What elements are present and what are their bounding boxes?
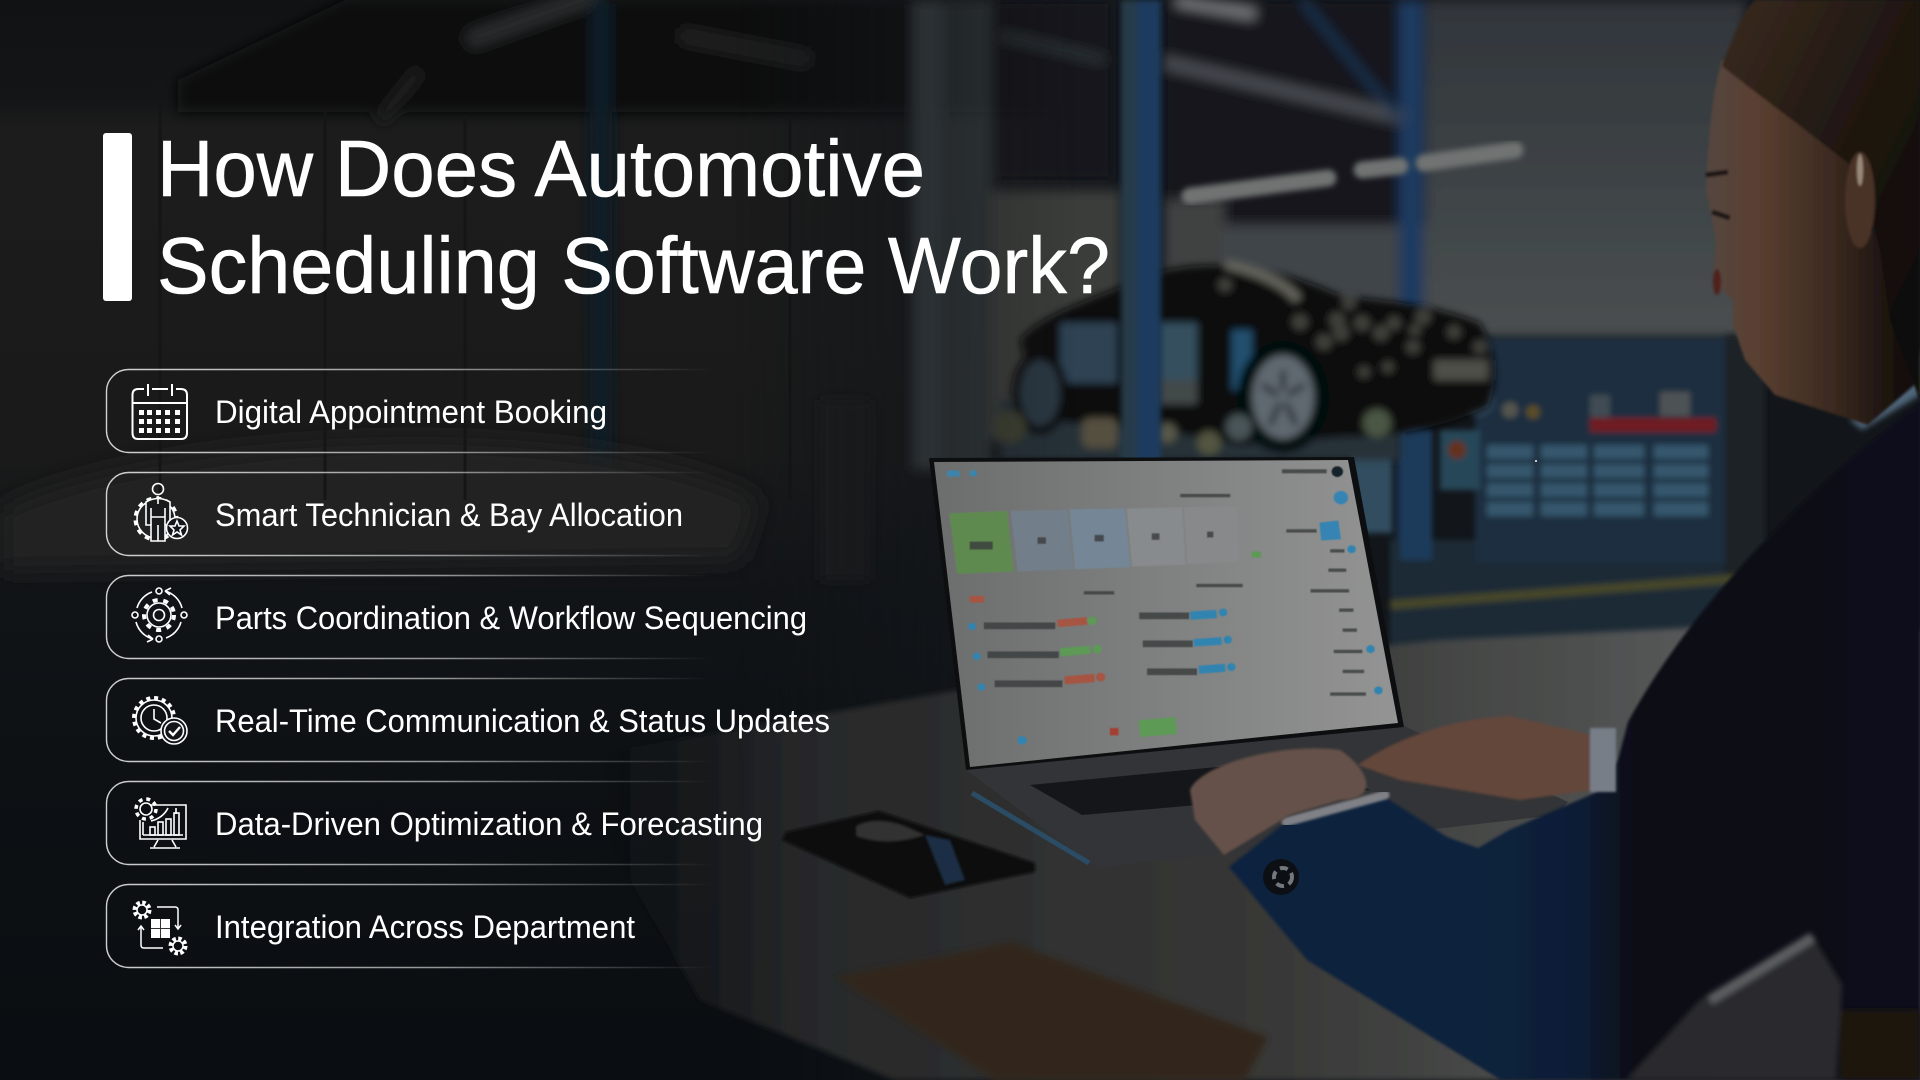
label: digital appointment booking: Digital Appointment Booking — [215, 394, 607, 430]
step 3: parts coordination and workflow sequencing — [106, 576, 906, 658]
icon: gear clock with check badge — [134, 698, 187, 744]
laptop screen — [934, 460, 1398, 767]
laptop — [929, 457, 1568, 868]
person suit and arm — [1190, 350, 1920, 1080]
label: smart technician and bay allocation: Smart Technician & Bay Allocation — [215, 497, 683, 533]
lips — [1713, 269, 1721, 295]
suit jacket — [1229, 404, 1920, 1080]
left ceiling band and beams — [176, 0, 938, 574]
title: How Does Automotive — [157, 124, 925, 213]
label: real-time communication and status updates: Real-Time Communication & Status Updates — [215, 703, 830, 739]
label: parts coordination and workflow sequencing: Parts Coordination & Workflow Sequencing — [215, 600, 807, 636]
jacket button — [1263, 859, 1299, 895]
ear — [1845, 152, 1875, 248]
step 2: smart technician and bay allocation — [106, 472, 906, 556]
hands on keyboard — [1190, 716, 1616, 855]
dashboard on laptop screen — [947, 466, 1383, 745]
title accent bar — [103, 133, 132, 301]
step 5: data-driven optimization and forecasting — [106, 782, 906, 864]
label: integration across department: Integration Across Department — [215, 909, 635, 945]
label: data-driven optimization and forecasting: Data-Driven Optimization & Forecasting — [215, 806, 763, 842]
shirt cuff — [1286, 795, 1385, 822]
step 4: real-time communication and status updates — [106, 678, 906, 762]
ceiling lights — [1190, 150, 1515, 196]
icon: technician with gear and star — [135, 484, 188, 541]
floor and tool cabinets — [1350, 335, 1790, 680]
lifted car — [994, 264, 1494, 460]
step 1: digital appointment booking — [106, 370, 906, 452]
left side darkened scene — [0, 0, 1006, 1080]
icon: gear with cycle arrows — [132, 588, 187, 642]
icon: monitor chart with gear — [136, 799, 186, 848]
icon: calendar — [132, 384, 187, 439]
notebook on desk — [836, 942, 1268, 1080]
face — [1706, 60, 1920, 425]
laptop base — [966, 726, 1568, 868]
title: Scheduling Software Work? — [157, 221, 1110, 310]
faint car on the left — [0, 441, 760, 570]
small light speck — [1535, 460, 1537, 462]
shirt collar — [1850, 350, 1920, 430]
icon: puzzle with two gears — [134, 902, 186, 954]
desk surface — [560, 625, 1920, 1080]
phone on desk — [782, 811, 1035, 898]
laptop lid — [929, 457, 1404, 770]
chair — [1626, 937, 1920, 1080]
front blue column — [1121, 0, 1161, 465]
person head and hair — [1706, 0, 1920, 425]
step 6: integration across department — [106, 884, 906, 968]
keyboard — [1030, 760, 1370, 815]
hair — [1722, 0, 1920, 400]
garage background wall and beams — [912, 0, 1746, 560]
title — [157, 124, 1110, 310]
eye and glasses — [1706, 172, 1730, 218]
